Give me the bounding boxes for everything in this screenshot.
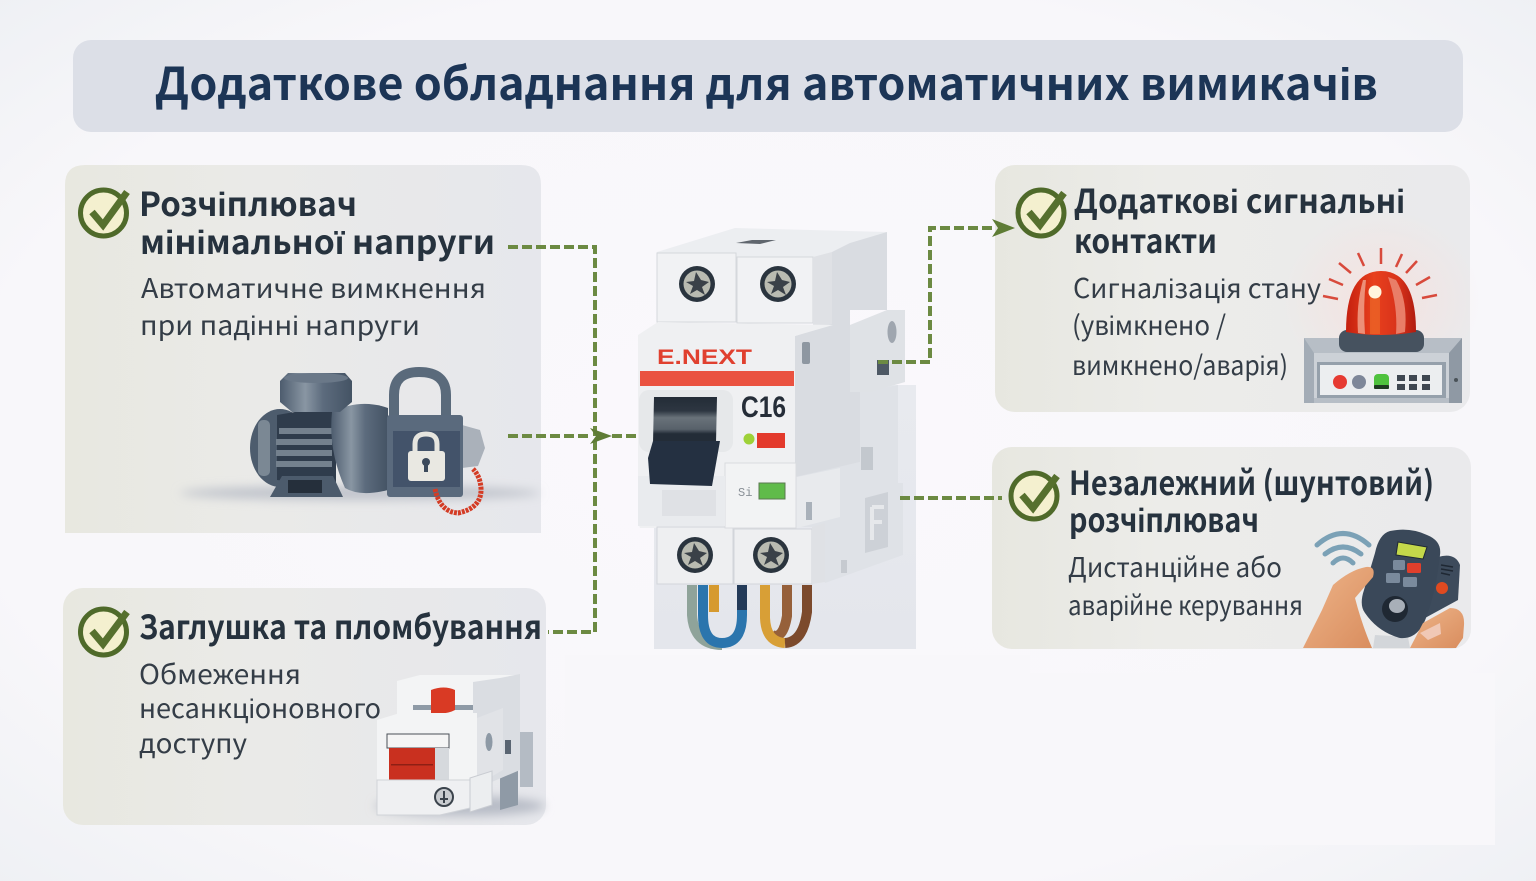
heading: shunt release: Незалежний (шунтовий) xyxy=(1069,457,1434,505)
glow behind beacon xyxy=(1281,210,1481,390)
lower right module xyxy=(797,385,903,583)
icon: sealed cover xyxy=(375,674,545,816)
breaker illustration xyxy=(638,228,916,649)
icon: wifi signal xyxy=(1317,534,1369,563)
text: shunt description: Дистанційне або xyxy=(1068,546,1282,585)
text: undervoltage description: при падінні напруги xyxy=(140,304,420,343)
title bar xyxy=(73,40,1463,132)
brand name: E.NEXT xyxy=(657,346,752,369)
panel: shunt release xyxy=(992,447,1471,649)
heading: undervoltage release: мінімальної напруги xyxy=(140,216,495,264)
upper right module xyxy=(850,310,905,392)
text: undervoltage description: Автоматичне вимкнення xyxy=(141,267,486,306)
toggle handle xyxy=(639,390,733,486)
pale patches below the breaker xyxy=(565,655,1495,845)
body front xyxy=(638,322,833,528)
body side xyxy=(795,318,860,477)
rating label: C16 xyxy=(741,391,786,424)
heading: shunt release: розчіплювач xyxy=(1069,494,1259,542)
top terminal block xyxy=(657,228,887,322)
text: sealing description: доступу xyxy=(139,722,247,761)
text: signal description xyxy=(1072,267,1321,383)
text: signal description: вимкнено/аварія) xyxy=(1072,344,1288,383)
text: sealing description: Обмеження xyxy=(139,653,301,692)
text: sealing description xyxy=(139,653,381,761)
wires xyxy=(692,585,807,645)
arrow: undervoltage release to breaker xyxy=(508,428,638,444)
heading: shunt release xyxy=(1069,457,1434,542)
text: sealing description: несанкціоновного xyxy=(139,687,381,726)
title: Додаткове обладнання для автоматичних вимикачів xyxy=(155,48,1378,113)
text: undervoltage description xyxy=(140,267,486,343)
lower front panel: Si xyxy=(738,486,752,500)
rear mounting plate xyxy=(654,385,916,649)
bottom terminal block xyxy=(657,523,825,584)
heading: signal contacts: Додаткові сигнальні xyxy=(1074,175,1405,223)
heading: signal contacts xyxy=(1074,175,1405,263)
arrow: breaker to signal contacts xyxy=(878,219,1015,362)
icon: hand holding remote xyxy=(1303,530,1464,648)
brand strip xyxy=(640,371,794,386)
heading: signal contacts: контакти xyxy=(1074,215,1217,263)
heading: undervoltage release: Розчіплювач xyxy=(139,178,357,226)
icon: check mark xyxy=(1018,190,1064,236)
panel: signal contacts xyxy=(995,165,1481,412)
terminal screws xyxy=(679,266,796,302)
heading: undervoltage release xyxy=(139,178,495,264)
icon: check mark xyxy=(80,190,127,236)
icon: alarm beacon xyxy=(1304,248,1462,403)
panel: cover and sealing xyxy=(63,588,546,825)
text: shunt description: аварійне керування xyxy=(1068,584,1303,623)
lower side panel xyxy=(797,468,840,528)
icon: check mark xyxy=(80,609,127,655)
heading: cover and sealing: Заглушка та пломбування xyxy=(139,601,542,649)
text: signal description: Сигналізація стану xyxy=(1073,267,1321,306)
lower terminal screws xyxy=(677,537,789,573)
text: shunt description xyxy=(1068,546,1303,623)
text: signal description: (увімкнено / xyxy=(1072,304,1226,343)
status indicators xyxy=(744,433,785,448)
panel: undervoltage release xyxy=(65,165,541,533)
connector: top left to plug panel xyxy=(508,247,595,632)
icon: check mark xyxy=(1011,473,1057,519)
lower front panel xyxy=(638,463,796,528)
connector: breaker to shunt release xyxy=(900,496,1002,500)
icon: motor with padlock xyxy=(180,372,540,513)
